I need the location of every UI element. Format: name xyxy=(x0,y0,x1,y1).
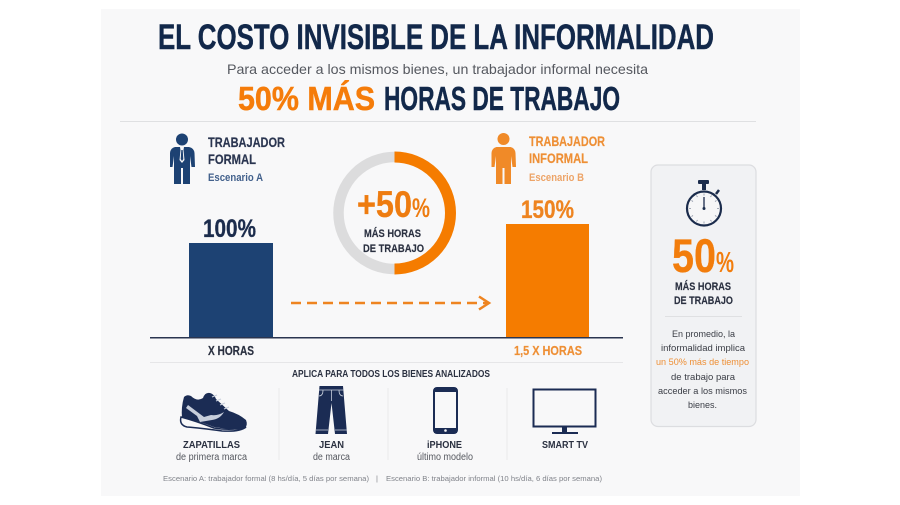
label: trabajador informal xyxy=(529,133,605,184)
description: acceder a los mismos xyxy=(658,386,747,397)
value: 50%: % xyxy=(716,247,734,279)
description: bienes. xyxy=(688,400,717,411)
label: zapatillas: de primera marca xyxy=(176,452,247,463)
label: x horas: X HORAS xyxy=(208,344,254,358)
label: trabajador informal: TRABAJADOR xyxy=(529,133,605,149)
icon: jeans xyxy=(316,386,347,434)
description: En promedio, la xyxy=(672,329,736,340)
axis xyxy=(150,337,623,338)
label: iphone: último modelo xyxy=(417,452,473,463)
description: de trabajo para xyxy=(671,372,736,383)
item: smart tv xyxy=(534,390,596,451)
value: 150%: 150% xyxy=(521,196,574,224)
background panel xyxy=(101,9,800,496)
subtitle: Para acceder a los mismos bienes, un trabajador informal necesita xyxy=(227,61,648,77)
icon: stopwatch xyxy=(687,180,721,226)
caption: DE TRABAJO xyxy=(674,295,733,307)
label: trabajador formal: Escenario A xyxy=(208,172,263,184)
ring gauge xyxy=(338,157,451,269)
label: jean: JEAN xyxy=(319,440,344,451)
ring caption xyxy=(363,227,424,255)
bar: informal xyxy=(506,224,589,337)
bar chart xyxy=(150,196,623,358)
panel: trabajador informal xyxy=(492,133,605,184)
item: zapatillas xyxy=(176,393,247,463)
icon: sneaker xyxy=(181,393,247,431)
value: 100%: 100% xyxy=(203,215,256,243)
label: zapatillas: ZAPATILLAS xyxy=(183,440,240,451)
headline: HORAS DE TRABAJO xyxy=(384,80,620,117)
ring caption: MÁS HORAS xyxy=(364,227,421,240)
arrow xyxy=(291,296,489,310)
label: trabajador formal xyxy=(208,134,285,184)
label: trabajador informal: INFORMAL xyxy=(529,150,588,166)
label: jean xyxy=(313,440,350,463)
panel: trabajador formal xyxy=(170,134,285,184)
caption: MÁS HORAS xyxy=(675,280,731,293)
footnote: Escenario B: trabajador informal (10 hs/día, 6 días por semana) xyxy=(386,474,603,483)
footnote: | xyxy=(376,474,378,483)
label: iphone xyxy=(417,440,473,463)
label: jean: de marca xyxy=(313,452,350,463)
footnote: Escenario A: trabajador formal (8 hs/día, 5 días por semana) xyxy=(163,474,370,483)
goods section heading: APLICA PARA TODOS LOS BIENES ANALIZADOS xyxy=(292,368,490,380)
caption xyxy=(674,280,733,307)
label: iphone: iPHONE xyxy=(427,440,462,451)
panel: side callout xyxy=(651,165,756,426)
label: smart tv: SMART TV xyxy=(542,440,588,451)
label: zapatillas xyxy=(176,440,247,463)
bar: formal xyxy=(189,243,273,337)
value: 50%: 50 xyxy=(672,229,716,282)
icon: phone xyxy=(434,388,457,433)
item: iphone xyxy=(417,388,473,463)
footnote xyxy=(163,474,603,483)
headline xyxy=(238,80,620,117)
headline: 50% MÁS xyxy=(238,80,375,117)
label: trabajador informal: Escenario B xyxy=(529,172,584,184)
icon: tv xyxy=(534,390,596,434)
icon: formal worker xyxy=(170,134,195,184)
description: un 50% más de tiempo xyxy=(656,357,749,368)
title: EL COSTO INVISIBLE DE LA INFORMALIDAD xyxy=(158,18,714,57)
label: trabajador formal: FORMAL xyxy=(208,151,256,167)
description xyxy=(656,329,749,411)
item: jean xyxy=(313,386,350,463)
icon: informal worker xyxy=(492,133,516,184)
ring value: % xyxy=(412,193,430,223)
label: 1,5 x horas: 1,5 X HORAS xyxy=(514,344,582,358)
ring caption: DE TRABAJO xyxy=(363,243,424,255)
label: trabajador formal: TRABAJADOR xyxy=(208,134,285,150)
description: informalidad implica xyxy=(661,343,746,354)
ring value: +50 xyxy=(357,184,412,225)
